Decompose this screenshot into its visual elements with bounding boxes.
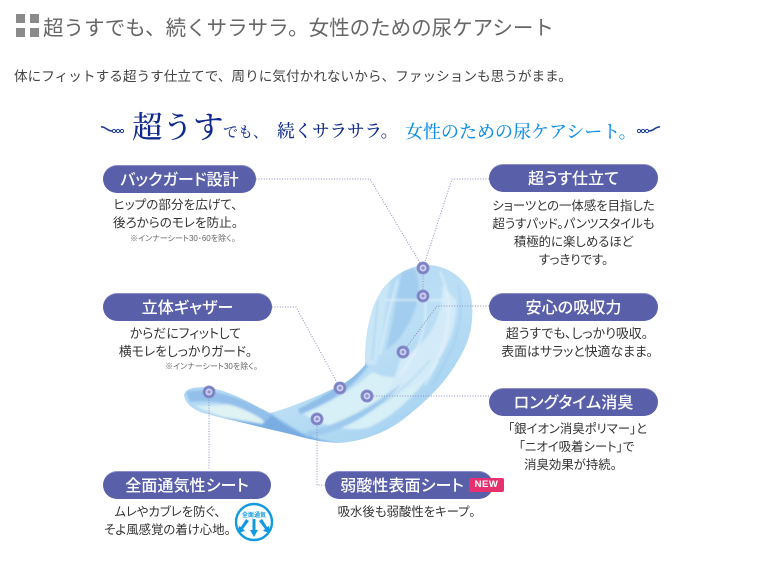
text: long-lasting deodorant [508,422,647,472]
label: back guard [103,165,256,193]
label: long-lasting deodorant [489,388,658,416]
pad illustration [184,265,472,445]
label: absorbency: 安心の吸収力 [526,299,621,317]
text: 3D gather: 横モレをしっかりガード。 [119,344,252,359]
text: back guard [113,198,238,230]
text: breathable sheet: そよ風感覚の着け心地。 [104,523,231,537]
label: long-lasting deodorant: ロングタイム消臭 [514,394,633,412]
text: breathable sheet: ムレやカブレを防ぐ、 [114,505,221,519]
text: ultra thin: すっきりです。 [539,253,608,267]
text: weakly acidic surface: 吸水後も弱酸性をキープ。 [338,505,475,519]
label: weakly acidic surface [325,471,493,499]
marker dots [203,262,429,425]
text: 3D gather: からだにフィットして [130,326,241,341]
label: back guard: バックガード設計 [120,171,239,189]
text: long-lasting deodorant: 「銀イオン消臭ポリマー」と [508,422,647,436]
text: ultra thin: ショーツとの一体感を目指した [492,199,655,213]
icon: ventilation badge: 全面通気 [242,511,266,519]
text: ultra thin: 積極的に楽しめるほど [514,235,633,249]
label: 3D gather [103,293,272,321]
icon: ventilation badge [236,504,272,540]
label: 3D gather: 立体ギャザー [142,299,233,317]
label: breathable sheet [103,471,271,499]
page title: 超うすでも、続くサラサラ。女性のための尿ケアシート [43,17,554,40]
diagram: pad and leader lines [100,126,660,542]
text: absorbency [501,326,653,359]
banner heading: 超うす [132,111,224,145]
text: back guard: ヒップの部分を広げて、 [113,198,238,212]
banner heading: 続くサラサラ。 [277,121,398,141]
note: 3D gather: ※インナーシート30を除く。 [165,362,258,371]
label: ultra thin [489,164,658,192]
label: breathable sheet: 全面通気性シート [125,477,249,495]
label: weakly acidic surface: 弱酸性表面シート [340,477,464,495]
text: absorbency: 表面はサラッと快適なまま。 [501,344,653,359]
text: absorbency: 超うすでも、しっかり吸収。 [506,326,648,341]
badge: new: NEW [475,479,498,490]
text: breathable sheet [104,505,231,537]
banner heading: でも、 [223,125,268,141]
text: ultra thin [492,199,655,267]
intro text: 体にフィットする超うす仕立てで、周りに気付かれないから、ファッションも思うがまま。 [14,69,572,84]
label: absorbency [489,293,658,321]
leader lines [209,179,489,485]
text: long-lasting deodorant: 消臭効果が持続。 [524,458,617,472]
banner heading: 女性のための尿ケアシート。 [405,122,637,142]
text: ultra thin: 超うすパッド。パンツスタイルも [493,217,654,231]
banner ornament left [101,127,124,133]
text: long-lasting deodorant: 「ニオイ吸着シート」で [519,440,634,454]
banner ornament right [637,127,660,133]
banner heading [132,111,637,145]
text: back guard: 後ろからのモレを防止。 [113,216,238,230]
note: back guard: ※インナーシート30･60を除く。 [130,234,236,243]
icon: missing image placeholder [16,14,39,37]
text: 3D gather [119,326,252,359]
label: ultra thin: 超うす仕立て [528,170,619,188]
badge: new [469,478,504,492]
